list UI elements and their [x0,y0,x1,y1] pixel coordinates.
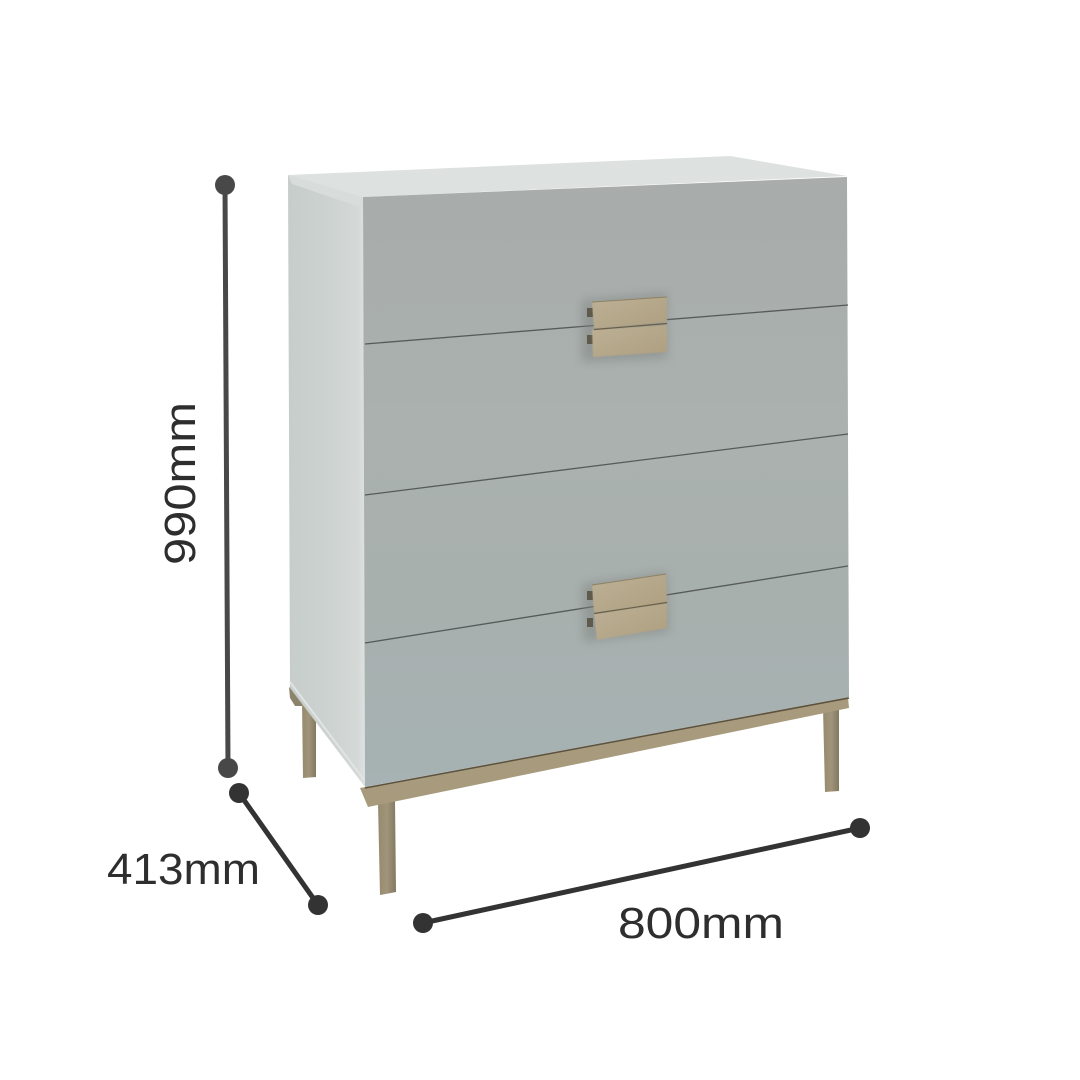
front left leg [378,800,396,895]
dimension: width 800mm: 800mm [618,899,784,948]
cabinet front [363,177,849,787]
dimension: depth 413mm: 413mm [107,845,260,894]
cabinet top [288,156,847,197]
chest of drawers [288,156,849,895]
rear base frame [289,687,302,706]
rear left leg [302,700,316,778]
dimension: depth 413mm [107,783,328,915]
base shadow line [365,698,849,788]
dimension: height 990mm [156,175,238,778]
side top bevel [288,175,363,208]
drawer dividers [365,305,848,643]
right leg [823,706,839,792]
bottom handle [582,572,669,642]
cabinet side [288,175,365,787]
base frame [360,697,849,807]
dimension: width 800mm [413,818,870,948]
side bottom edge [290,682,365,781]
dimension: height 990mm: 990mm [156,402,205,565]
top handle [582,293,667,362]
